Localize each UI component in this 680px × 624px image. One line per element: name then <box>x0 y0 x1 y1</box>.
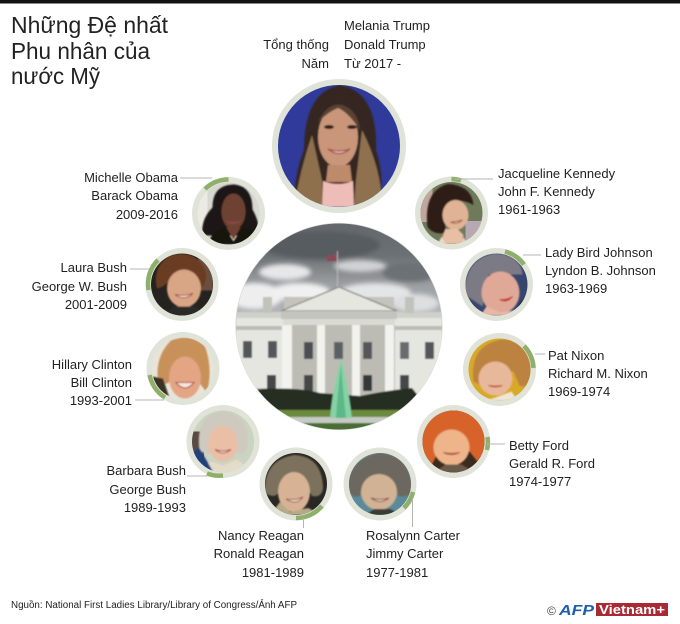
label: Rosalynn Carter: Jimmy Carter <box>366 546 444 561</box>
logo: AFP Vietnam+ <box>547 602 668 619</box>
flag <box>336 251 338 288</box>
label: Pat Nixon: Pat Nixon <box>548 348 604 363</box>
label: Melania and Donald Trump: Donald Trump <box>344 37 426 52</box>
label: Jacqueline Kennedy <box>498 166 616 217</box>
portrait: Michelle Obama <box>192 177 265 250</box>
photo: White House <box>227 223 443 431</box>
label: Laura Bush: Laura Bush <box>60 260 127 275</box>
title: nước Mỹ <box>11 63 100 89</box>
label: Hillary Clinton: Hillary Clinton <box>52 357 132 372</box>
label: Hillary Clinton: Bill Clinton <box>71 375 132 390</box>
leader lines <box>130 178 545 528</box>
label: Rosalynn Carter: 1977-1981 <box>366 565 428 580</box>
label: Melania and Donald Trump: Melania Trump <box>344 18 430 33</box>
portrait: Barbara Bush <box>186 405 260 478</box>
windows <box>243 341 252 358</box>
label: Nancy Reagan: Ronald Reagan <box>214 546 304 561</box>
title <box>11 12 169 89</box>
top bar <box>0 0 680 4</box>
portrait: Hillary Clinton <box>146 332 220 405</box>
label: Michelle Obama: Barack Obama <box>91 188 179 203</box>
label: Melania and Donald Trump: Năm <box>302 56 329 71</box>
portrait: Betty Ford <box>417 405 490 478</box>
label: Melania and Donald Trump: Tổng thống <box>263 37 329 52</box>
label: Melania and Donald Trump: Từ 2017 - <box>344 56 401 71</box>
logo: AFP Vietnam+: Vietnam+ <box>599 603 665 617</box>
label: Lady Bird Johnson: Lyndon B. Johnson <box>545 263 656 278</box>
logo: AFP Vietnam+: © <box>547 604 556 618</box>
label: Hillary Clinton: 1993-2001 <box>70 393 132 408</box>
source note: Nguồn: National First Ladies Library/Library of Congress/Ảnh AFP <box>11 598 297 611</box>
label: Barbara Bush: George Bush <box>109 482 186 497</box>
label: Laura Bush <box>32 260 127 312</box>
label: Nancy Reagan: 1981-1989 <box>242 565 304 580</box>
label: Betty Ford <box>509 438 595 489</box>
portrait: Rosalynn Carter <box>344 448 416 520</box>
label: Barbara Bush: 1989-1993 <box>124 500 186 515</box>
portrait: Laura Bush <box>146 248 218 321</box>
label: Barbara Bush: Barbara Bush <box>106 463 186 478</box>
title: Phu nhân của <box>11 38 150 64</box>
lawn <box>270 410 410 417</box>
title: Những Đệ nhất <box>11 12 169 38</box>
label: Pat Nixon <box>548 348 648 399</box>
label: Nancy Reagan: Nancy Reagan <box>218 528 304 543</box>
portrait: Melania Trump <box>272 79 406 213</box>
building <box>236 318 442 395</box>
label: Jacqueline Kennedy: 1961-1963 <box>498 202 560 217</box>
portrait: Lady Bird Johnson <box>460 248 533 321</box>
portrait: Nancy Reagan <box>260 448 332 520</box>
label: Lady Bird Johnson <box>545 245 656 296</box>
label: Barbara Bush <box>106 463 186 515</box>
progress arc <box>205 180 228 189</box>
label: Jacqueline Kennedy: Jacqueline Kennedy <box>498 166 616 181</box>
portrait: Jacqueline Kennedy <box>415 176 488 250</box>
label: Betty Ford: Gerald R. Ford <box>509 456 595 471</box>
label: Betty Ford: 1974-1977 <box>509 474 571 489</box>
label: Nancy Reagan <box>214 528 304 580</box>
label: Laura Bush: George W. Bush <box>32 279 127 294</box>
label: Betty Ford: Betty Ford <box>509 438 569 453</box>
label: Pat Nixon: Richard M. Nixon <box>548 366 648 381</box>
hedge <box>256 388 420 411</box>
columns <box>282 325 292 397</box>
label: Rosalynn Carter: Rosalynn Carter <box>366 528 461 543</box>
label: Laura Bush: 2001-2009 <box>65 297 127 312</box>
logo: AFP Vietnam+: AFP <box>558 602 595 619</box>
label: Rosalynn Carter <box>366 528 461 580</box>
label: Pat Nixon: 1969-1974 <box>548 384 610 399</box>
label: Lady Bird Johnson: Lady Bird Johnson <box>545 245 653 260</box>
fountain <box>330 358 352 418</box>
label: Michelle Obama: Michelle Obama <box>84 170 179 185</box>
label: Michelle Obama <box>84 170 179 222</box>
label: Michelle Obama: 2009-2016 <box>116 207 178 222</box>
label: Melania and Donald Trump <box>263 18 430 71</box>
label: Jacqueline Kennedy: John F. Kennedy <box>498 184 595 199</box>
label: Hillary Clinton <box>52 357 132 408</box>
portrait: Pat Nixon <box>463 333 536 406</box>
label: Lady Bird Johnson: 1963-1969 <box>545 281 607 296</box>
